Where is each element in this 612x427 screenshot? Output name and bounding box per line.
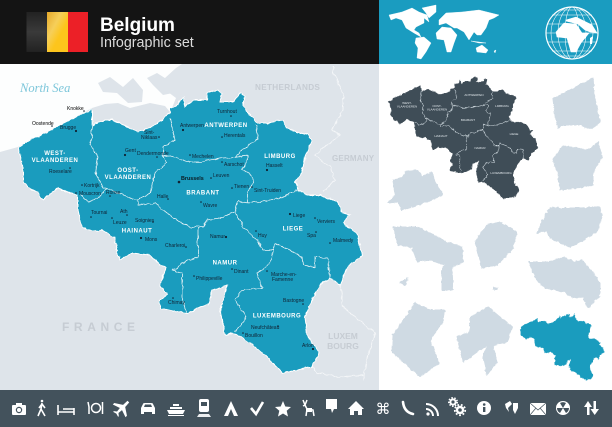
labels: neighbouring countries xyxy=(62,83,375,351)
icon: flag of Belgium xyxy=(26,12,88,52)
labels: provinces xyxy=(32,123,303,320)
subtitle: Infographic set xyxy=(100,35,194,51)
icon: ship xyxy=(167,404,185,416)
city names: Turnhout xyxy=(217,109,237,115)
labels: neighbouring countries: FRANCE xyxy=(62,320,140,334)
city names: Leuze xyxy=(113,220,127,226)
labels on dark map: NAMUR xyxy=(474,146,486,150)
city names: Tournai xyxy=(91,210,107,216)
neighbouring country borders xyxy=(312,66,375,380)
blue Belgium silhouette xyxy=(520,314,604,380)
city names: Leuven xyxy=(213,173,230,179)
city names: Brugge xyxy=(60,125,76,131)
city names: Brussels xyxy=(181,176,204,182)
icon: radiation xyxy=(556,401,570,415)
icon: mail xyxy=(530,403,546,415)
city names: Antwerpen xyxy=(180,123,204,129)
icon: up and down arrows xyxy=(584,401,599,415)
icon: world map xyxy=(389,5,499,59)
icon: gears xyxy=(449,398,465,415)
province silhouette: Namur xyxy=(457,307,512,375)
header bar xyxy=(0,0,379,64)
city names: Huy xyxy=(258,233,267,239)
labels: provinces: VLAANDEREN xyxy=(105,175,151,181)
city names: Mechelen xyxy=(192,154,214,160)
icon: command key: ⌘ xyxy=(376,400,390,418)
city names: Bastogne xyxy=(283,298,304,304)
province silhouette: Limburg xyxy=(537,207,602,247)
city names: Liege xyxy=(293,213,305,219)
city names: Arlon xyxy=(302,343,314,349)
province silhouette: West-Vlaanderen xyxy=(553,78,600,129)
labels: neighbouring countries: NETHERLANDS xyxy=(255,83,320,92)
labels: provinces: ANTWERPEN xyxy=(204,123,248,129)
labels: provinces: NAMUR xyxy=(213,260,238,266)
icon: camera xyxy=(12,403,26,415)
labels on dark map: VLAANDEREN xyxy=(397,104,417,108)
city names: Roeselare xyxy=(49,169,72,175)
city names: Gent xyxy=(125,148,136,154)
city names: Dendermonde xyxy=(137,151,169,157)
icon: star xyxy=(275,401,291,416)
city names: Philippeville xyxy=(196,276,223,282)
city names: Tienen xyxy=(234,184,249,190)
labels: provinces: LIEGE xyxy=(283,226,303,232)
icon: phone xyxy=(403,402,413,414)
icon: speech pin xyxy=(326,399,337,413)
labels on dark map: OOST- xyxy=(432,104,442,108)
Belgium provinces xyxy=(18,90,363,373)
icon: plane xyxy=(109,395,135,421)
labels: provinces: LIMBURG xyxy=(264,154,296,160)
city names: Neufchâteau xyxy=(251,325,280,331)
header world panel xyxy=(379,0,612,64)
icon: globe small xyxy=(505,401,518,414)
province silhouette: Brabant xyxy=(475,222,517,290)
province silhouette: Luxembourg xyxy=(392,303,445,377)
icon: train xyxy=(197,399,211,417)
province silhouette: Oost-Vlaanderen xyxy=(553,142,602,190)
city names: Namur xyxy=(210,234,225,240)
city names: Bouillon xyxy=(245,333,263,339)
icon: deer xyxy=(303,400,314,416)
labels on dark map: BRABANT xyxy=(461,118,475,122)
city names: Ronse xyxy=(106,190,121,196)
icon: home xyxy=(348,401,364,415)
city dots xyxy=(51,110,331,350)
province silhouette: Liege xyxy=(529,257,600,308)
labels on dark map: LIEGE xyxy=(510,132,518,136)
icon: walker xyxy=(38,400,45,416)
city names: Niklaas xyxy=(141,135,158,141)
labels: provinces: LUXEMBOURG xyxy=(253,314,301,320)
province silhouette: Antwerpen xyxy=(388,170,443,210)
icon: rss xyxy=(426,404,438,416)
labels: provinces: OOST- xyxy=(117,168,139,174)
city names: Hasselt xyxy=(266,163,283,169)
city names: Spa xyxy=(307,233,316,239)
labels: provinces: BRABANT xyxy=(186,190,220,196)
labels: provinces: HAINAUT xyxy=(122,228,152,234)
labels on dark map: ANTWERPEN xyxy=(464,93,484,97)
panel: icon bar xyxy=(0,390,612,427)
city names: Wavre xyxy=(203,203,217,209)
labels on dark map xyxy=(397,93,518,175)
icon: bed xyxy=(58,405,74,415)
labels: neighbouring countries: GERMANY xyxy=(332,154,375,163)
labels: provinces: WEST- xyxy=(44,151,66,157)
label: North Sea: North Sea xyxy=(19,81,70,95)
title: Belgium xyxy=(100,15,175,36)
city names: Charleroi xyxy=(165,243,185,249)
labels on dark map: HAINAUT xyxy=(434,134,448,138)
city names: Sint- xyxy=(144,130,155,136)
labels: neighbouring countries: BOURG xyxy=(327,341,359,351)
city names: Sint-Truiden xyxy=(254,188,281,194)
city names: Dinant xyxy=(234,269,249,275)
city names: Aarschot xyxy=(224,162,244,168)
city names: Marche-en- xyxy=(271,272,297,278)
labels: provinces: VLAANDEREN xyxy=(32,158,78,164)
city names: Mons xyxy=(145,237,158,243)
city names: Chimay xyxy=(168,300,185,306)
labels on dark map: VLAANDEREN xyxy=(427,108,447,112)
map background xyxy=(0,62,379,390)
icon: car xyxy=(141,403,155,414)
panel: dark Belgium map xyxy=(389,77,538,199)
labels: neighbouring countries: LUXEM xyxy=(328,331,358,341)
icon: plate and cutlery xyxy=(88,402,102,414)
labels on dark map: LUXEMBOURG xyxy=(490,171,512,175)
city names: Halle xyxy=(157,194,169,200)
city names: Malmedy xyxy=(333,238,354,244)
labels on dark map: WEST- xyxy=(402,101,412,105)
Zeeland islands xyxy=(98,73,177,103)
city names xyxy=(32,106,354,349)
icon: globe xyxy=(546,7,598,59)
city names: Soignies xyxy=(135,218,155,224)
labels on dark map: LIMBURG xyxy=(495,104,509,108)
city names: Kortrijk xyxy=(84,183,100,189)
city names: Mouscron xyxy=(79,191,101,197)
city names: Famenne xyxy=(272,277,293,283)
icon: tent xyxy=(224,401,238,416)
city names: Ath xyxy=(120,209,128,215)
city names: Oostende xyxy=(32,121,54,127)
icon: info xyxy=(477,401,491,415)
North Sea water xyxy=(0,64,182,152)
city names: Verviers xyxy=(317,219,336,225)
panel: main map xyxy=(0,64,375,380)
city names: Herentals xyxy=(224,133,246,139)
province silhouette: Hainaut xyxy=(393,227,463,290)
icon: check xyxy=(251,402,263,414)
city names: Knokke xyxy=(67,106,84,112)
